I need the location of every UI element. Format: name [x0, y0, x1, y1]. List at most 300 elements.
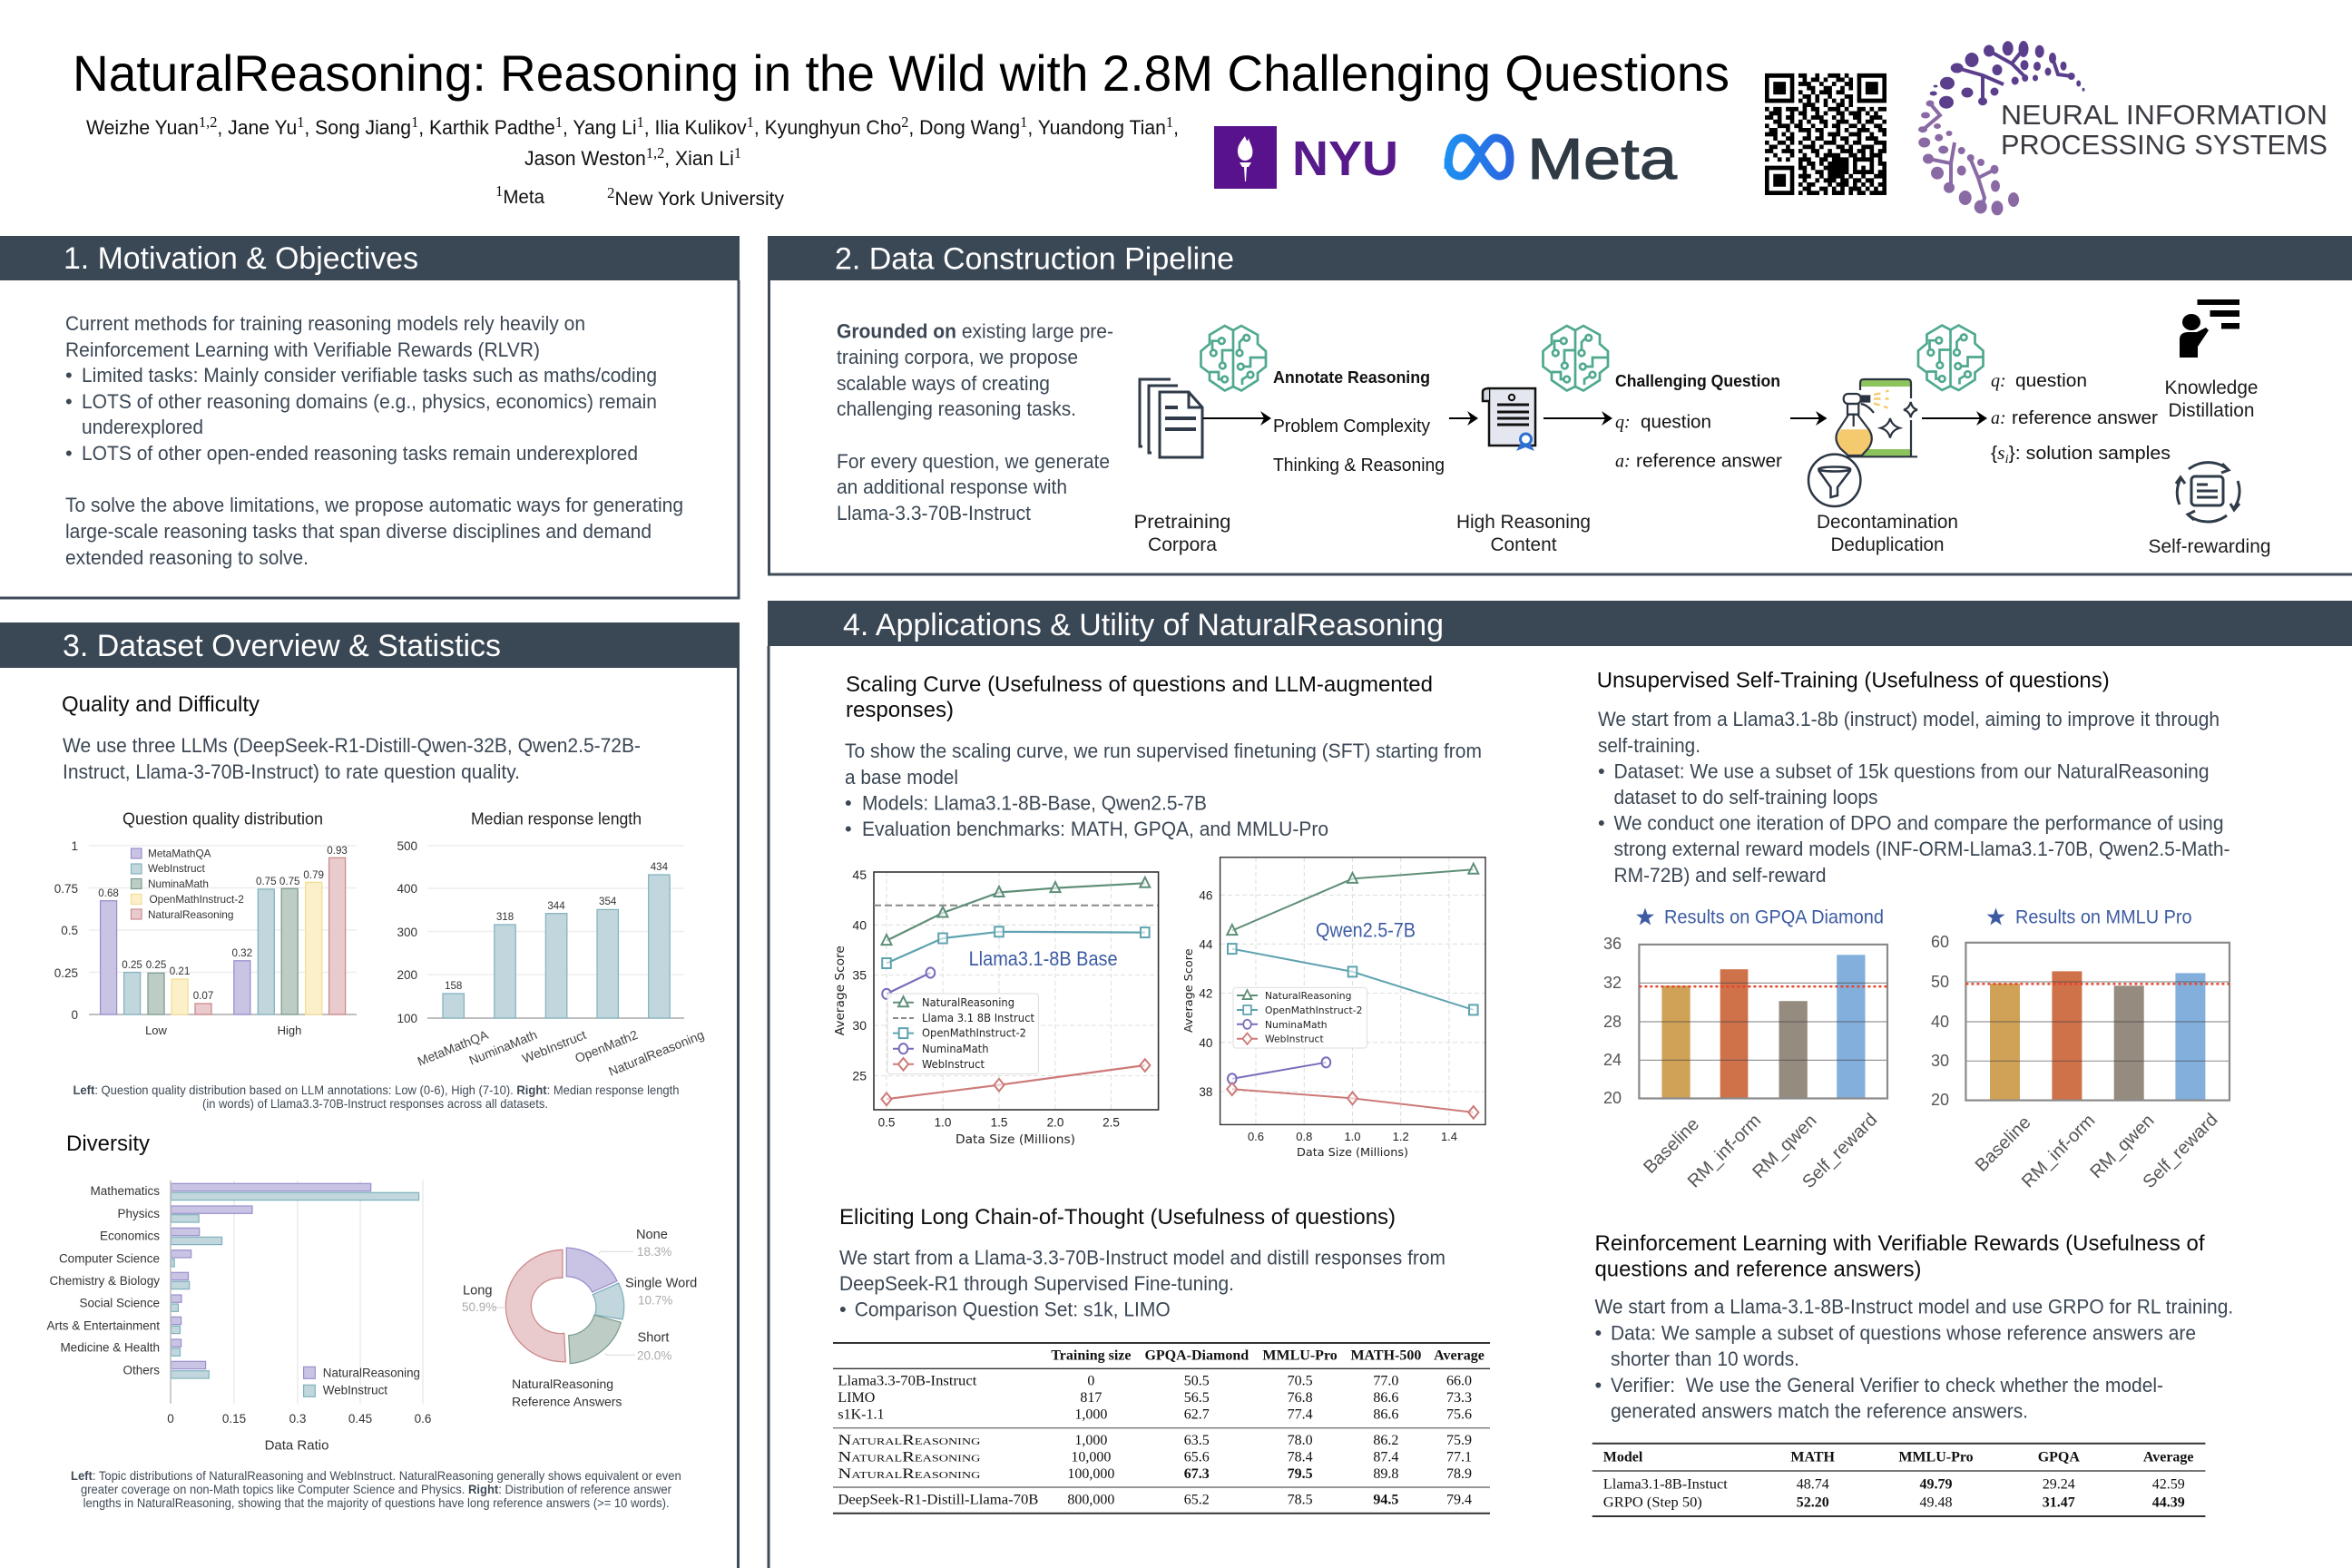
authors and affiliations: , Dong Wang [908, 116, 1020, 139]
bar chart: median response length: Median response length [471, 809, 642, 828]
text block: RLVR description [1595, 1296, 2233, 1422]
table: long chain-of-thought comparison: 62.7 [1184, 1407, 1210, 1423]
label: pretraining corpora: Pretraining [1134, 511, 1230, 533]
table: RLVR results: 49.79 [1920, 1477, 1953, 1493]
bar chart: results on GPQA Diamond: 36 [1603, 935, 1622, 953]
bar chart: median response length: MetaMathQA [416, 1027, 491, 1069]
text block: scaling curve description: a base model [845, 766, 958, 789]
text block: RLVR description: Verifier: We use the General Verifier to check whether the model- [1611, 1374, 2163, 1396]
text block: pipeline description: scalable ways of creating [837, 372, 1050, 395]
bar chart: topic distribution: Arts & Entertainment [46, 1318, 160, 1332]
bar chart: results on GPQA Diamond: 32 [1603, 974, 1622, 992]
text block: motivation body [65, 312, 683, 569]
table: long chain-of-thought comparison: GPQA-Diamond [1144, 1348, 1249, 1363]
logo: Neural Information Processing Systems [1918, 41, 2328, 215]
bar chart: median response length: 318 [496, 911, 514, 923]
authors and affiliations: 1 [555, 113, 563, 131]
label: knowledge distillation: Knowledge [2165, 377, 2258, 398]
title: NaturalReasoning: Reasoning in the Wild with 2.8M Challenging Questions [73, 44, 1730, 102]
donut chart: reference answer lengths [462, 1228, 697, 1408]
bar chart: topic distribution: Economics [100, 1230, 160, 1243]
bar chart: question quality distribution: 0.21 [170, 965, 190, 977]
bar chart: results on MMLU Pro: Results on MMLU Pro [2015, 907, 2192, 928]
icon: self-rewarding loop [2176, 463, 2239, 522]
bar chart: results on MMLU Pro: 40 [1931, 1013, 1949, 1031]
text block: pipeline description [837, 319, 1113, 524]
bar chart: topic distribution: 0.45 [348, 1412, 372, 1426]
table: long chain-of-thought comparison: 817 [1080, 1390, 1102, 1406]
text block: challenging question: question [1641, 412, 1711, 432]
table: RLVR results: GPQA [2038, 1450, 2080, 1465]
line chart: Qwen2.5-7B: 1.4 [1441, 1130, 1457, 1143]
text block: eliciting description: We start from a Llama-3.3-70B-Instruct model and distill responses from [839, 1246, 1446, 1269]
text block: quality description: We use three LLMs (DeepSeek-R1-Distill-Qwen-32B, Qwen2.5-72B- [63, 734, 641, 757]
legend: Llama chart [887, 994, 1038, 1074]
legend: quality chart: NuminaMath [148, 877, 209, 890]
line chart: Qwen2.5-7B: 46 [1199, 888, 1212, 902]
text block: quality description: Instruct, Llama-3-70B-Instruct) to rate question quality. [63, 760, 520, 783]
bar chart: question quality distribution [54, 809, 357, 1037]
text block: self-training description: We conduct one iteration of DPO and compare the performance of using [1613, 812, 2223, 835]
table: long chain-of-thought comparison: NaturalReasoning [838, 1466, 980, 1482]
label: decontamination deduplication: Deduplication [1831, 534, 1944, 555]
line chart: Qwen2.5-7B [1181, 858, 1485, 1159]
bar chart: median response length: 158 [445, 980, 462, 992]
label: self-rewarding: Self-rewarding [2149, 535, 2270, 557]
authors and affiliations: , Ilia Kulikov [644, 116, 747, 139]
donut chart: reference answer lengths: Short [637, 1330, 669, 1345]
donut chart: reference answer lengths: 20.0% [637, 1348, 671, 1362]
text block: eliciting description: DeepSeek-R1 through Supervised Fine-tuning. [839, 1272, 1234, 1295]
icon: document stack [1140, 379, 1203, 458]
caption: diversity charts [71, 1469, 681, 1510]
bar chart: results on GPQA Diamond [1603, 907, 1887, 1192]
table: long chain-of-thought comparison: 63.5 [1184, 1433, 1210, 1448]
text block: final dataset fields: i [2004, 453, 2009, 466]
text block: eliciting description: • [839, 1298, 847, 1321]
authors and affiliations [86, 113, 1179, 210]
bar chart: results on MMLU Pro: Baseline [1972, 1112, 2035, 1176]
label: high reasoning content [1456, 511, 1591, 555]
bar chart: topic distribution: Computer Science [59, 1251, 160, 1265]
text block: final dataset fields: {s [1991, 444, 2004, 464]
table: RLVR results: MATH [1790, 1450, 1836, 1465]
bar chart: question quality distribution: 0.93 [327, 845, 348, 857]
table: long chain-of-thought comparison: 1,000 [1074, 1433, 1107, 1448]
table: long chain-of-thought comparison: 78.5 [1288, 1492, 1313, 1507]
table: long chain-of-thought comparison: 76.8 [1288, 1390, 1313, 1406]
subheading: reinforcement learning with verifiable rewards: questions and reference answers) [1595, 1258, 1922, 1282]
authors and affiliations: 1 [1166, 113, 1173, 131]
arrow: to high reasoning content [1449, 411, 1478, 426]
authors and affiliations: 1,2 [646, 144, 664, 162]
legend: quality chart: NaturalReasoning [148, 908, 233, 921]
bar chart: question quality distribution: Low [145, 1024, 168, 1037]
legend: Llama chart: NaturalReasoning [922, 996, 1014, 1009]
text block: motivation body: • [65, 442, 73, 465]
subheading: scaling curve: Scaling Curve (Usefulness of questions and LLM-augmented [846, 672, 1433, 697]
logo: Neural Information Processing Systems: NEURAL INFORMATION [2001, 99, 2328, 131]
authors and affiliations: , Kyunghyun Cho [754, 116, 901, 139]
text block: motivation body: underexplored [82, 416, 203, 438]
text block: final dataset fields: question [2015, 371, 2087, 391]
bar chart: results on MMLU Pro: 30 [1931, 1052, 1949, 1070]
table: long chain-of-thought comparison: 89.8 [1373, 1466, 1398, 1482]
text block: pipeline description: training corpora, we propose [837, 346, 1078, 368]
bar chart: question quality distribution: 0.75 [256, 876, 277, 887]
table: long chain-of-thought comparison: LIMO [838, 1390, 875, 1406]
table: long chain-of-thought comparison: 86.2 [1373, 1433, 1398, 1448]
QR code [1765, 75, 1886, 193]
text block: motivation body: • [65, 364, 73, 387]
bar chart: results on GPQA Diamond: RM_inf-orm [1684, 1111, 1765, 1191]
text block: motivation body: LOTS of other open-ended reasoning tasks remain underexplored [82, 442, 638, 465]
table: long chain-of-thought comparison: 56.5 [1184, 1390, 1210, 1406]
text block: self-training description: strong external reward models (INF-ORM-Llama3.1-70B, Qwen2.5-Math- [1613, 838, 2230, 860]
heading: section 3: 3. Dataset Overview & Statistics [63, 629, 501, 663]
label: decontamination deduplication: Decontamination [1817, 511, 1958, 533]
bar chart: results on MMLU Pro: RM_qwen [2086, 1111, 2159, 1182]
bar chart: topic distribution: 0.15 [222, 1412, 246, 1426]
table: long chain-of-thought comparison: 77.1 [1446, 1450, 1472, 1465]
text block: pipeline description: Grounded on existing large pre- [837, 319, 1113, 343]
subheading: unsupervised self-training: Unsupervised Self-Training (Usefulness of questions) [1597, 669, 2110, 693]
line chart: Qwen2.5-7B: 40 [1199, 1036, 1212, 1050]
legend: topic chart: NaturalReasoning [323, 1366, 420, 1379]
line chart: Qwen2.5-7B: 1.0 [1344, 1130, 1361, 1143]
logo: NYU: NYU [1292, 132, 1398, 186]
caption: quality charts: Left: Question quality distribution based on LLM annotations: Low (0-6), High (7-10). Right: Median response length [73, 1083, 679, 1097]
table: RLVR results: 31.47 [2043, 1495, 2075, 1511]
table: RLVR results [1592, 1444, 2205, 1516]
bar chart: results on MMLU Pro: 20 [1931, 1091, 1949, 1109]
authors and affiliations: Meta [503, 187, 544, 208]
text block: final dataset fields: reference answer [2012, 408, 2158, 428]
legend: Llama chart: Llama 3.1 8B Instruct [922, 1012, 1034, 1024]
text block: self-training description: Dataset: We use a subset of 15k questions from our NaturalReasoning [1613, 760, 2209, 782]
table: RLVR results: GRPO (Step 50) [1603, 1495, 1702, 1511]
label: decontamination deduplication [1817, 511, 1958, 555]
subheading: scaling curve [846, 672, 1433, 722]
subheading: reinforcement learning with verifiable rewards: Reinforcement Learning with Verifiable Rewards (Usefulness of [1595, 1231, 2205, 1256]
table: long chain-of-thought comparison: 75.6 [1446, 1407, 1472, 1423]
line chart: Qwen2.5-7B: 0.6 [1248, 1130, 1264, 1143]
subheading: quality and difficulty: Quality and Difficulty [62, 692, 260, 717]
line chart: Llama3.1-8B Base: 40 [852, 918, 867, 933]
bar chart: median response length: NaturalReasoning [606, 1027, 706, 1079]
authors and affiliations: 1 [734, 144, 741, 162]
bar chart: median response length: NuminaMath [467, 1027, 539, 1068]
table: long chain-of-thought comparison: MMLU-Pro [1262, 1348, 1338, 1363]
table: long chain-of-thought comparison: 78.9 [1446, 1466, 1472, 1482]
authors and affiliations: , Song Jiang [304, 116, 411, 139]
bar chart: question quality distribution: 0.07 [193, 990, 213, 1002]
bar chart: topic distribution: Physics [117, 1207, 160, 1220]
authors and affiliations: 1 [637, 113, 644, 131]
bar chart: results on GPQA Diamond: Baseline [1640, 1114, 1703, 1178]
table: long chain-of-thought comparison: 78.0 [1288, 1433, 1313, 1448]
line chart: Qwen2.5-7B: Data Size (Millions) [1297, 1145, 1408, 1159]
bar chart: results on MMLU Pro: 50 [1931, 973, 1949, 991]
table: long chain-of-thought comparison: 0 [1087, 1374, 1094, 1389]
table: long chain-of-thought comparison: 86.6 [1373, 1390, 1398, 1406]
icon: knowledge distillation [2180, 299, 2239, 358]
text block: pipeline description: Llama-3.3-70B-Instruct [837, 502, 1031, 524]
label: knowledge distillation: Distillation [2169, 399, 2254, 421]
table: long chain-of-thought comparison: 70.5 [1288, 1374, 1313, 1389]
bar chart: results on GPQA Diamond: 20 [1603, 1089, 1622, 1107]
table: long chain-of-thought comparison: 79.4 [1446, 1492, 1472, 1507]
table: long chain-of-thought comparison: Average [1434, 1348, 1485, 1363]
bar chart: question quality distribution: 0.32 [232, 947, 252, 959]
table: long chain-of-thought comparison: DeepSeek-R1-Distill-Llama-70B [838, 1492, 1038, 1507]
line chart: Llama3.1-8B Base [834, 867, 1159, 1147]
authors and affiliations: , Yang Li [563, 116, 637, 139]
line chart: Qwen2.5-7B: Average Score [1181, 948, 1195, 1033]
table: long chain-of-thought comparison: 73.3 [1446, 1390, 1472, 1406]
table: long chain-of-thought comparison: 1,000 [1074, 1407, 1107, 1423]
icon: brain challenging question [1543, 326, 1608, 390]
donut chart: reference answer lengths: NaturalReasoning [512, 1377, 613, 1391]
text block: challenging question: reference answer [1636, 452, 1782, 472]
arrow: to final dataset [1922, 411, 1987, 426]
text block: RLVR description: generated answers match the reference answers. [1611, 1399, 2028, 1422]
bar chart: question quality distribution: 0.5 [61, 924, 78, 937]
legend: quality chart: MetaMathQA [148, 848, 211, 860]
bar chart: topic distribution: Others [122, 1363, 160, 1377]
table: long chain-of-thought comparison: 800,000 [1067, 1492, 1114, 1507]
table: long chain-of-thought comparison: Training size [1051, 1348, 1131, 1363]
legend: topic chart: WebInstruct [323, 1384, 387, 1397]
bar chart: question quality distribution: 0.25 [146, 959, 166, 971]
bar chart: median response length [397, 809, 706, 1079]
table: long chain-of-thought comparison: 86.6 [1373, 1407, 1398, 1423]
text block: self-training description: dataset to do self-training loops [1613, 786, 1878, 808]
authors and affiliations: 1 [1020, 113, 1027, 131]
donut chart: reference answer lengths: 18.3% [637, 1245, 671, 1259]
caption: diversity charts: greater coverage on non-Math topics like Computer Science and Physics. Right: Distribution of reference answer [81, 1483, 671, 1496]
table: RLVR results: MMLU-Pro [1898, 1450, 1974, 1465]
donut chart: reference answer lengths: None [636, 1228, 668, 1242]
table: RLVR results: 52.20 [1797, 1495, 1829, 1511]
caption: diversity charts: Left: Topic distributions of NaturalReasoning and WebInstruct. NaturalReasoning generally shows equivalent or even [71, 1469, 681, 1483]
table: long chain-of-thought comparison: NaturalReasoning [838, 1433, 980, 1448]
legend: Qwen chart: OpenMathInstruct-2 [1265, 1004, 1363, 1016]
icon: spray cleaner [1831, 379, 1917, 456]
text block: eliciting description [839, 1246, 1446, 1321]
authors and affiliations: 1 [411, 113, 418, 131]
legend: Qwen chart: NuminaMath [1265, 1019, 1328, 1031]
bar chart: question quality distribution: 0.25 [122, 959, 142, 971]
bar chart: topic distribution: 0.6 [415, 1412, 431, 1426]
table: long chain-of-thought comparison: 75.9 [1446, 1433, 1472, 1448]
table: long chain-of-thought comparison: 77.0 [1373, 1374, 1398, 1389]
bar chart: question quality distribution: Question quality distribution [122, 809, 323, 828]
table: long chain-of-thought comparison: s1K-1.1 [838, 1407, 885, 1423]
text block: challenging question [1615, 372, 1782, 472]
icon: funnel filter [1808, 455, 1860, 506]
table: long chain-of-thought comparison: 79.5 [1288, 1466, 1313, 1482]
authors and affiliations: Jason Weston [524, 147, 651, 170]
bar chart: results on MMLU Pro [1931, 907, 2230, 1192]
label: pretraining corpora: Corpora [1148, 534, 1217, 555]
line chart: Llama3.1-8B Base: 25 [852, 1069, 867, 1083]
text block: RLVR description: Data: We sample a subset of questions whose reference answers are [1611, 1322, 2196, 1345]
text block: scaling curve description: Evaluation benchmarks: MATH, GPQA, and MMLU-Pro [862, 818, 1328, 840]
bar chart: results on MMLU Pro: 60 [1931, 933, 1949, 951]
authors and affiliations: , Karthik Padthe [418, 116, 555, 139]
line chart: Llama3.1-8B Base: Average Score [834, 946, 848, 1035]
text block: pipeline description: an additional response with [837, 475, 1067, 498]
legend: quality chart: WebInstruct [148, 862, 205, 875]
bar chart: topic distribution [46, 1181, 431, 1454]
table: long chain-of-thought comparison: 78.4 [1288, 1450, 1313, 1465]
text block: annotate reasoning: Thinking & Reasoning [1273, 456, 1445, 475]
bar chart: median response length: WebInstruct [520, 1027, 588, 1066]
table: RLVR results: 49.48 [1920, 1495, 1953, 1511]
text block: self-training description: self-training. [1598, 734, 1700, 757]
text block: motivation body: To solve the above limitations, we propose automatic ways for generating [65, 494, 683, 516]
text block: RLVR description: We start from a Llama-3.1-8B-Instruct model and use GRPO for RL training. [1595, 1296, 2233, 1318]
line chart: Qwen2.5-7B: 44 [1199, 937, 1213, 951]
table: long chain-of-thought comparison: 65.2 [1184, 1492, 1210, 1507]
donut chart: reference answer lengths: 10.7% [638, 1294, 672, 1308]
bar chart: results on GPQA Diamond: RM_qwen [1749, 1111, 1821, 1182]
donut chart: reference answer lengths: 50.9% [462, 1300, 496, 1314]
text block: motivation body: Current methods for training reasoning models rely heavily on [65, 312, 585, 335]
logo: Neural Information Processing Systems: PROCESSING SYSTEMS [2001, 129, 2328, 161]
legend: Llama chart: WebInstruct [922, 1058, 985, 1071]
text block: motivation body: extended reasoning to solve. [65, 546, 309, 569]
line chart: Llama3.1-8B Base: 35 [852, 967, 867, 982]
text block: annotate reasoning: Annotate Reasoning [1273, 368, 1430, 387]
table: RLVR results: Llama3.1-8B-Instuct [1603, 1477, 1728, 1493]
authors and affiliations: , Jane Yu [217, 116, 297, 139]
text block: motivation body: LOTS of other reasoning domains (e.g., physics, economics) remain [82, 390, 657, 413]
text block: annotate reasoning [1273, 368, 1445, 475]
bar chart: results on MMLU Pro: RM_inf-orm [2018, 1111, 2099, 1191]
authors and affiliations: 1 [747, 113, 754, 131]
bar chart: question quality distribution: High [278, 1024, 301, 1037]
bar chart: topic distribution: Social Science [79, 1297, 160, 1310]
text block: final dataset fields: q: [1991, 371, 2006, 391]
line chart: Qwen2.5-7B: 0.8 [1296, 1130, 1312, 1143]
bar chart: median response length: 100 [397, 1012, 417, 1025]
legend: topic chart [304, 1366, 420, 1397]
caption: diversity charts: lengths in NaturalReasoning, showing that the majority of questions have long reference answers (>= 10 words). [83, 1496, 670, 1510]
heading: section 4: 4. Applications & Utility of NaturalReasoning [843, 608, 1444, 642]
text block: challenging question: a: [1615, 452, 1631, 472]
table: long chain-of-thought comparison: NaturalReasoning [838, 1450, 980, 1465]
line chart: Llama3.1-8B Base: Llama3.1-8B Base [969, 947, 1118, 970]
text block: RLVR description: • [1595, 1322, 1602, 1345]
line chart: Llama3.1-8B Base: 1.5 [991, 1116, 1007, 1129]
table: long chain-of-thought comparison: 100,000 [1067, 1466, 1114, 1482]
line chart: Llama3.1-8B Base: 45 [852, 867, 867, 882]
line chart: Qwen2.5-7B: 38 [1199, 1085, 1212, 1099]
line chart: Llama3.1-8B Base: 2.5 [1102, 1116, 1120, 1129]
authors and affiliations: , Xian Li [664, 147, 734, 170]
panel: applications and utility [768, 601, 2352, 1568]
bar chart: results on MMLU Pro: Self_reward [2140, 1110, 2222, 1192]
legend: Qwen chart [1233, 987, 1367, 1048]
caption: quality charts: (in words) of Llama3.3-70B-Instruct responses across all datasets. [202, 1097, 548, 1111]
authors and affiliations: 1 [297, 113, 304, 131]
arrow: corpora to annotate [1203, 411, 1271, 426]
bar chart: median response length: 344 [547, 900, 565, 912]
logo: NYU [1214, 126, 1398, 189]
text block: self-training description: • [1598, 760, 1605, 782]
caption: quality charts [73, 1083, 679, 1111]
legend: quality chart: OpenMathInstruct-2 [149, 893, 244, 906]
table: RLVR results: 42.59 [2152, 1477, 2185, 1493]
text block: eliciting description: Comparison Question Set: s1k, LIMO [855, 1298, 1171, 1321]
donut chart: reference answer lengths: Long [463, 1284, 492, 1298]
line chart: Qwen2.5-7B: 42 [1199, 987, 1212, 1000]
subheading: scaling curve: responses) [846, 698, 954, 722]
panel: data construction pipeline [768, 236, 2352, 574]
table: long chain-of-thought comparison: 67.3 [1184, 1466, 1210, 1482]
authors and affiliations: , Yuandong Tian [1027, 116, 1166, 139]
subheading: diversity: Diversity [66, 1132, 150, 1156]
arrow: to challenging question [1544, 411, 1612, 426]
authors and affiliations: New York University [614, 189, 784, 210]
text block: motivation body: Reinforcement Learning with Verifiable Rewards (RLVR) [65, 338, 540, 361]
subheading: reinforcement learning with verifiable rewards [1595, 1231, 2205, 1282]
authors and affiliations: , [1173, 116, 1179, 139]
bar chart: question quality distribution: 1 [71, 839, 78, 853]
bar chart: topic distribution: Chemistry & Biology [49, 1274, 160, 1288]
bar chart: results on GPQA Diamond: 28 [1603, 1013, 1622, 1031]
line chart: Llama3.1-8B Base: 30 [852, 1018, 867, 1033]
table: long chain-of-thought comparison: 10,000 [1071, 1450, 1111, 1465]
text block: scaling curve description: To show the scaling curve, we run supervised finetuning (SFT) starting from [845, 740, 1482, 762]
legend: Llama chart: NuminaMath [922, 1043, 989, 1055]
line chart: Llama3.1-8B Base: Data Size (Millions) [956, 1133, 1075, 1147]
text block: RLVR description: shorter than 10 words. [1611, 1348, 1799, 1370]
bar chart: median response length: 300 [397, 926, 417, 939]
subheading: eliciting long chain-of-thought: Eliciting Long Chain-of-Thought (Usefulness of questions) [839, 1205, 1396, 1230]
bar chart: topic distribution: Mathematics [90, 1184, 160, 1198]
text block: final dataset fields: a: [1991, 408, 2006, 428]
logo: Meta [1448, 126, 1677, 191]
table: long chain-of-thought comparison: 94.5 [1373, 1492, 1398, 1507]
label: pretraining corpora [1134, 511, 1230, 555]
heading: section 2: 2. Data Construction Pipeline [835, 241, 1234, 276]
label: knowledge distillation [2165, 377, 2258, 421]
bar chart: median response length: 200 [397, 968, 417, 982]
text block: final dataset fields: }: solution samples [2009, 444, 2171, 464]
donut chart: reference answer lengths: Reference Answers [512, 1394, 622, 1408]
table: long chain-of-thought comparison: 87.4 [1373, 1450, 1398, 1465]
text block: final dataset fields [1991, 371, 2171, 466]
logo: Meta: Meta [1527, 126, 1677, 191]
table: RLVR results: Model [1603, 1450, 1643, 1465]
panel: dataset overview and statistics [0, 622, 740, 1568]
bar chart: median response length: 500 [397, 839, 417, 853]
legend: Qwen chart: WebInstruct [1265, 1034, 1324, 1045]
bar chart: results on GPQA Diamond: Self_reward [1798, 1110, 1881, 1192]
text block: motivation body: • [65, 390, 73, 413]
text block: scaling curve description: • [845, 818, 852, 840]
bar chart: topic distribution: 0 [167, 1412, 174, 1426]
table: long chain-of-thought comparison: 66.0 [1446, 1374, 1472, 1389]
legend: Qwen chart: NaturalReasoning [1265, 990, 1351, 1002]
bar chart: topic distribution: Data Ratio [265, 1438, 328, 1454]
authors and affiliations: 2 [901, 113, 908, 131]
bar chart: topic distribution: Medicine & Health [60, 1341, 160, 1355]
line chart: Llama3.1-8B Base: 2.0 [1047, 1116, 1063, 1129]
